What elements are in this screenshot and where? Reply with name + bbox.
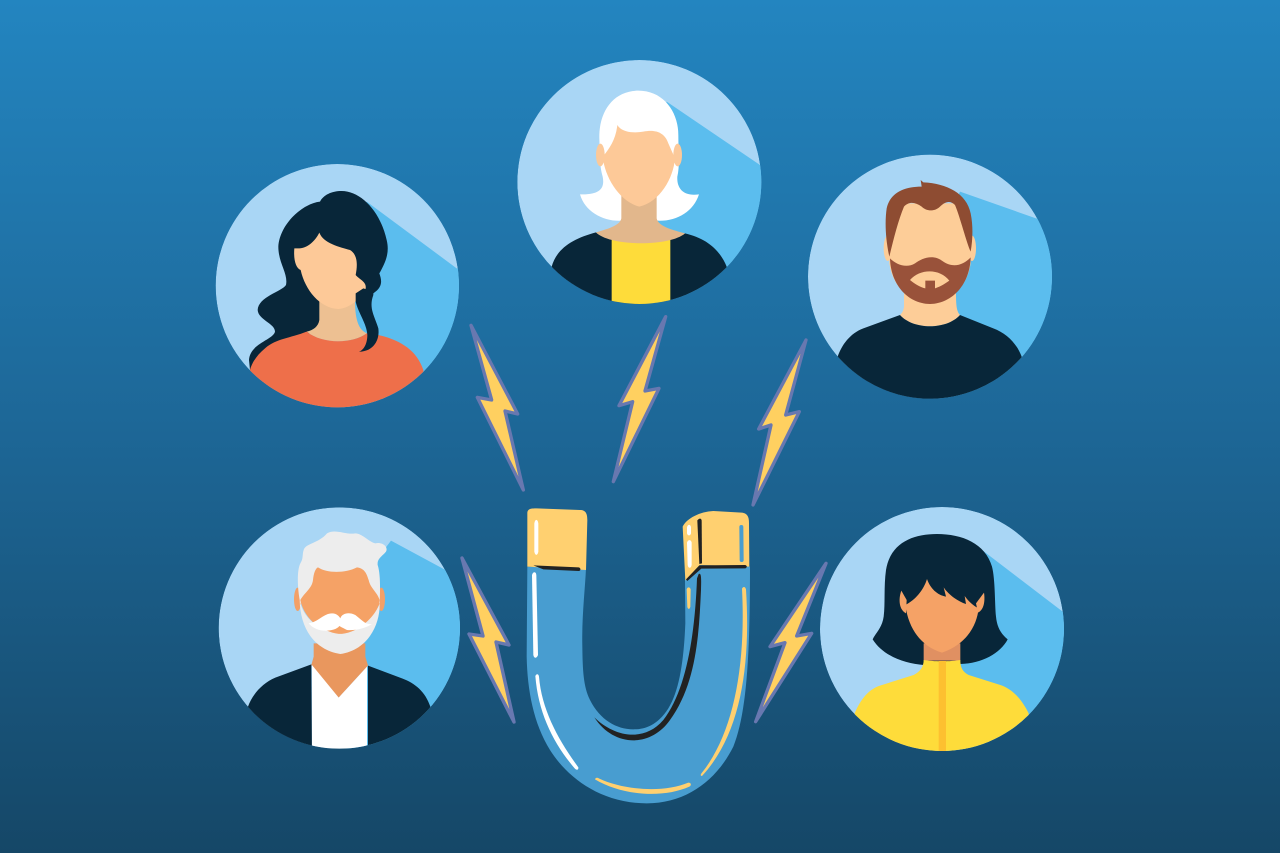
avatar: man with brown hair and beard <box>808 154 1052 399</box>
magnet right cap <box>683 511 749 581</box>
magnet dark lines <box>533 519 747 740</box>
avatar: woman with dark bob hair and yellow jacket <box>820 507 1064 751</box>
magnet yellow highlights <box>595 587 747 794</box>
bolt: upper right <box>753 340 806 505</box>
magnet blue stripe on right cap <box>735 527 748 560</box>
bolt: upper centre <box>613 317 666 482</box>
magnet white highlights <box>532 520 692 770</box>
bolt: upper left <box>471 325 523 490</box>
magnet body <box>527 565 750 803</box>
bolt: lower right <box>756 563 826 722</box>
bolt: lower left <box>462 558 514 722</box>
magnet left cap <box>527 508 587 570</box>
avatar: woman with dark wavy hair and orange top <box>216 164 459 408</box>
horseshoe magnet <box>527 508 750 803</box>
avatar: older woman with white hair and yellow top <box>517 60 762 304</box>
avatar: older man with white hair and moustache <box>218 508 460 749</box>
